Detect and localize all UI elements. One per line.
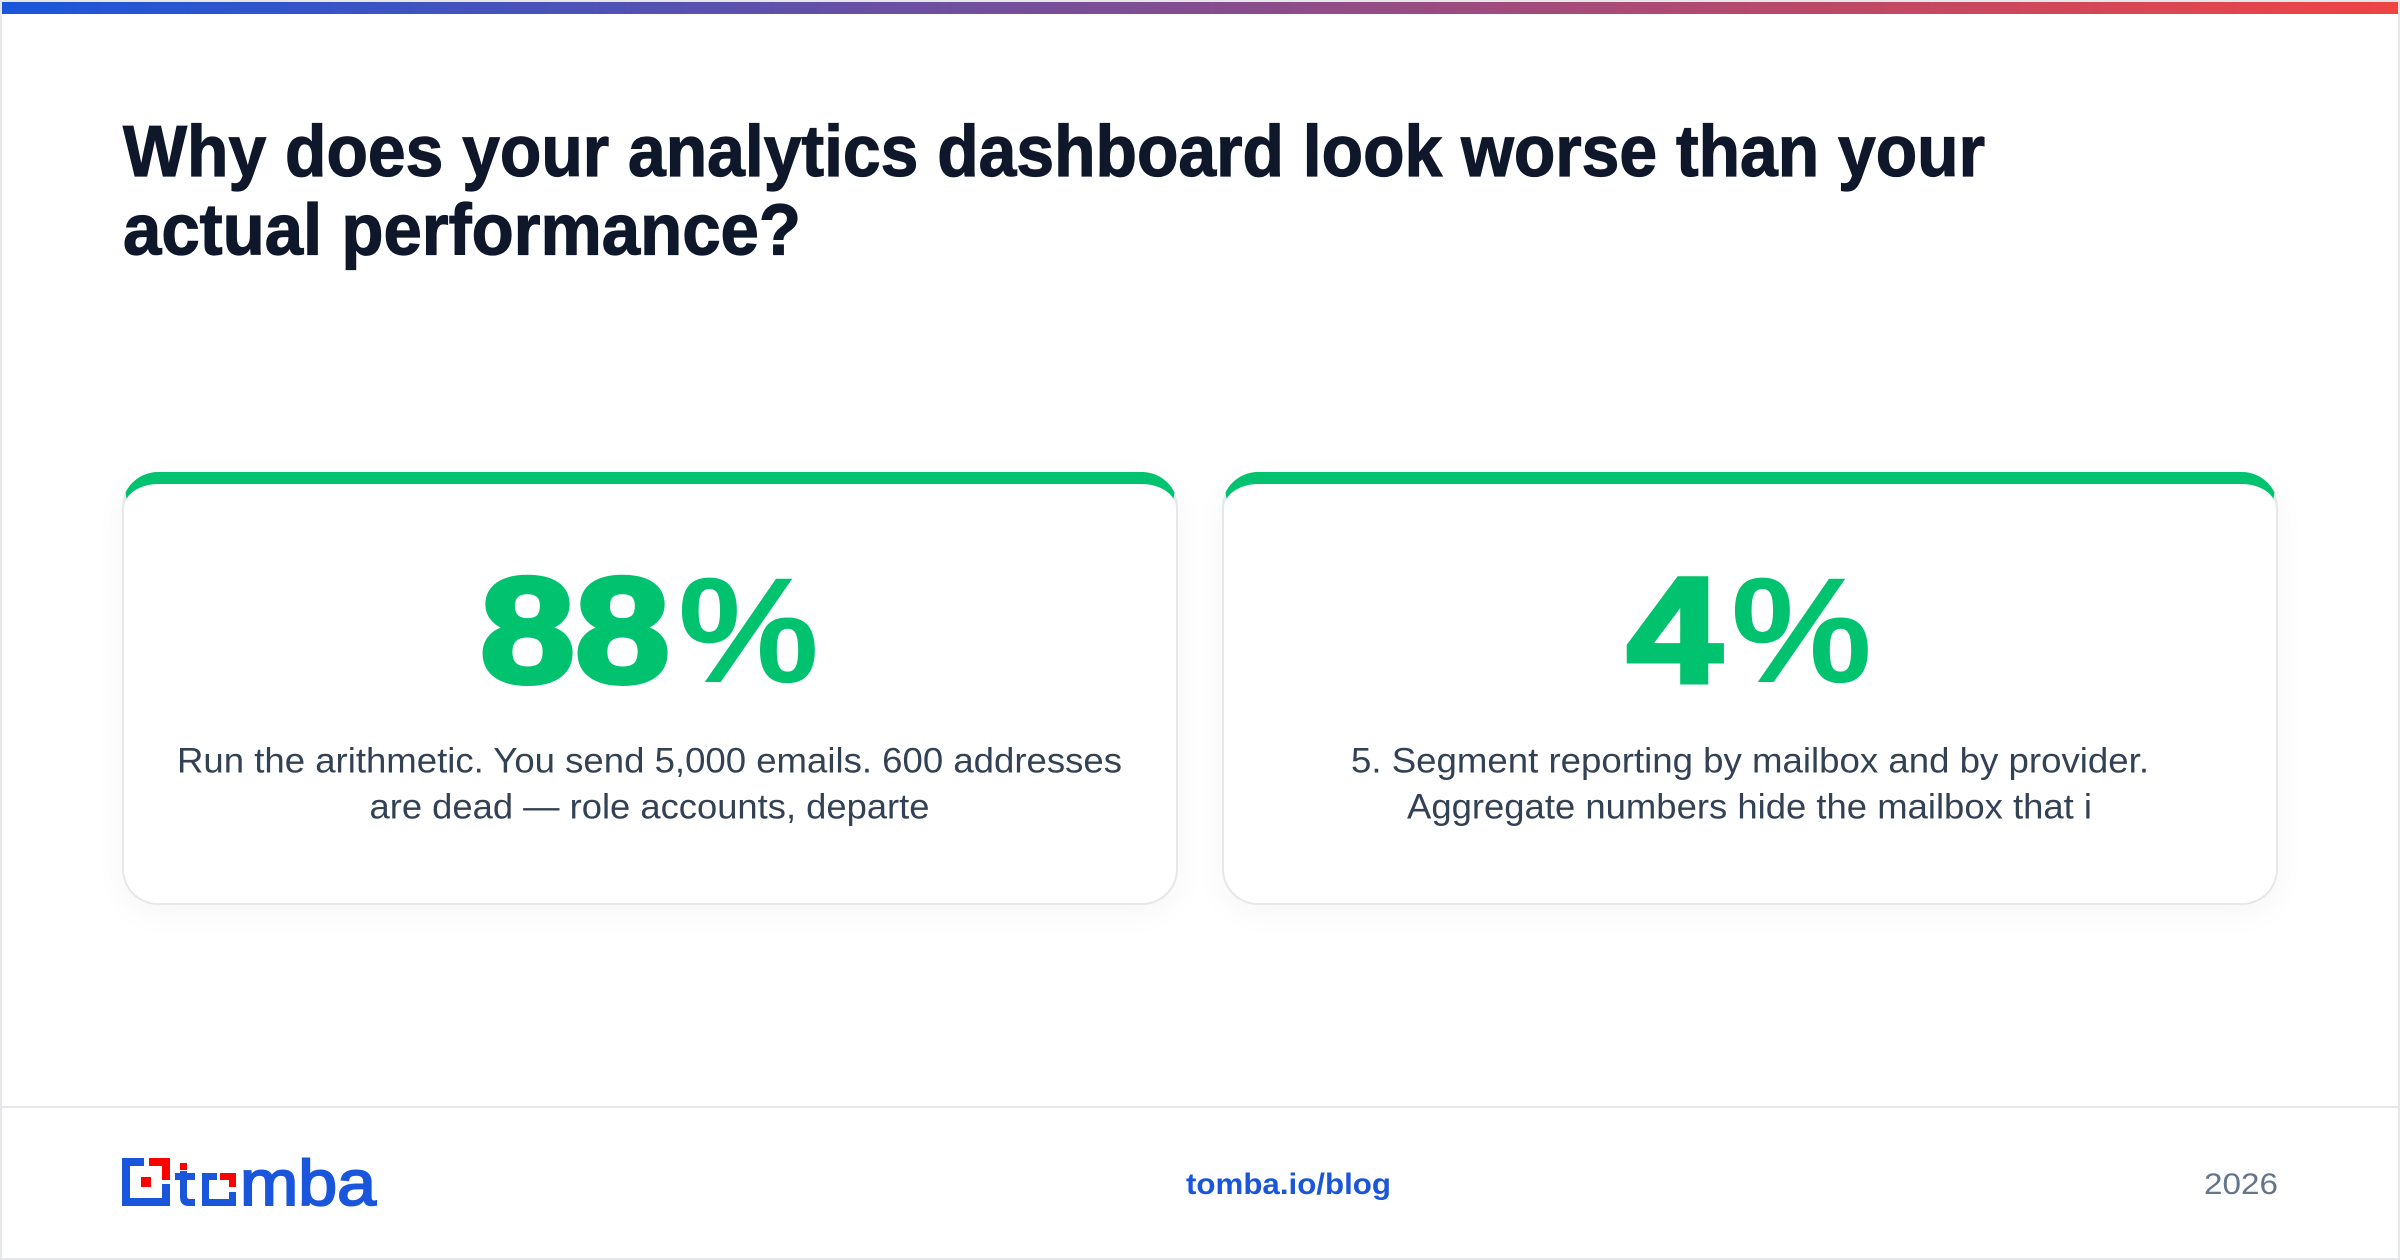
logo wordmark: mba — [240, 1147, 376, 1219]
big number: 4%: 4 — [1627, 546, 1722, 714]
footer logo: tomba — [122, 1147, 378, 1219]
icon: logo square mark — [122, 1158, 170, 1206]
big number: 4%: % — [1731, 546, 1872, 714]
panel: 88% stat card — [122, 472, 1178, 905]
title — [122, 112, 1985, 270]
big number: 88% — [480, 546, 819, 714]
description: 4% — [1351, 742, 2149, 826]
title: Why does your analytics dashboard look worse than your — [123, 112, 1985, 192]
top gradient bar — [2, 2, 2398, 14]
icon: stylised t and o — [175, 1163, 236, 1206]
description: 4%: 5. Segment reporting by mailbox and by provider. — [1351, 742, 2149, 780]
panel: 4% stat card — [1222, 472, 2278, 905]
description: 88%: Run the arithmetic. You send 5,000 emails. 600 addresses — [177, 742, 1122, 780]
footer link: tomba.io/blog — [1186, 1168, 1391, 1201]
title: actual performance? — [123, 190, 801, 270]
big number: 4% — [1627, 546, 1872, 714]
description: 88%: are dead — role accounts, departe — [370, 788, 930, 826]
footer year: 2026 — [2204, 1168, 2278, 1201]
big number: 88%: % — [678, 546, 819, 714]
description: 4%: Aggregate numbers hide the mailbox that i — [1407, 788, 2092, 826]
big number: 88%: 88 — [480, 546, 670, 714]
description: 88% — [177, 742, 1122, 826]
